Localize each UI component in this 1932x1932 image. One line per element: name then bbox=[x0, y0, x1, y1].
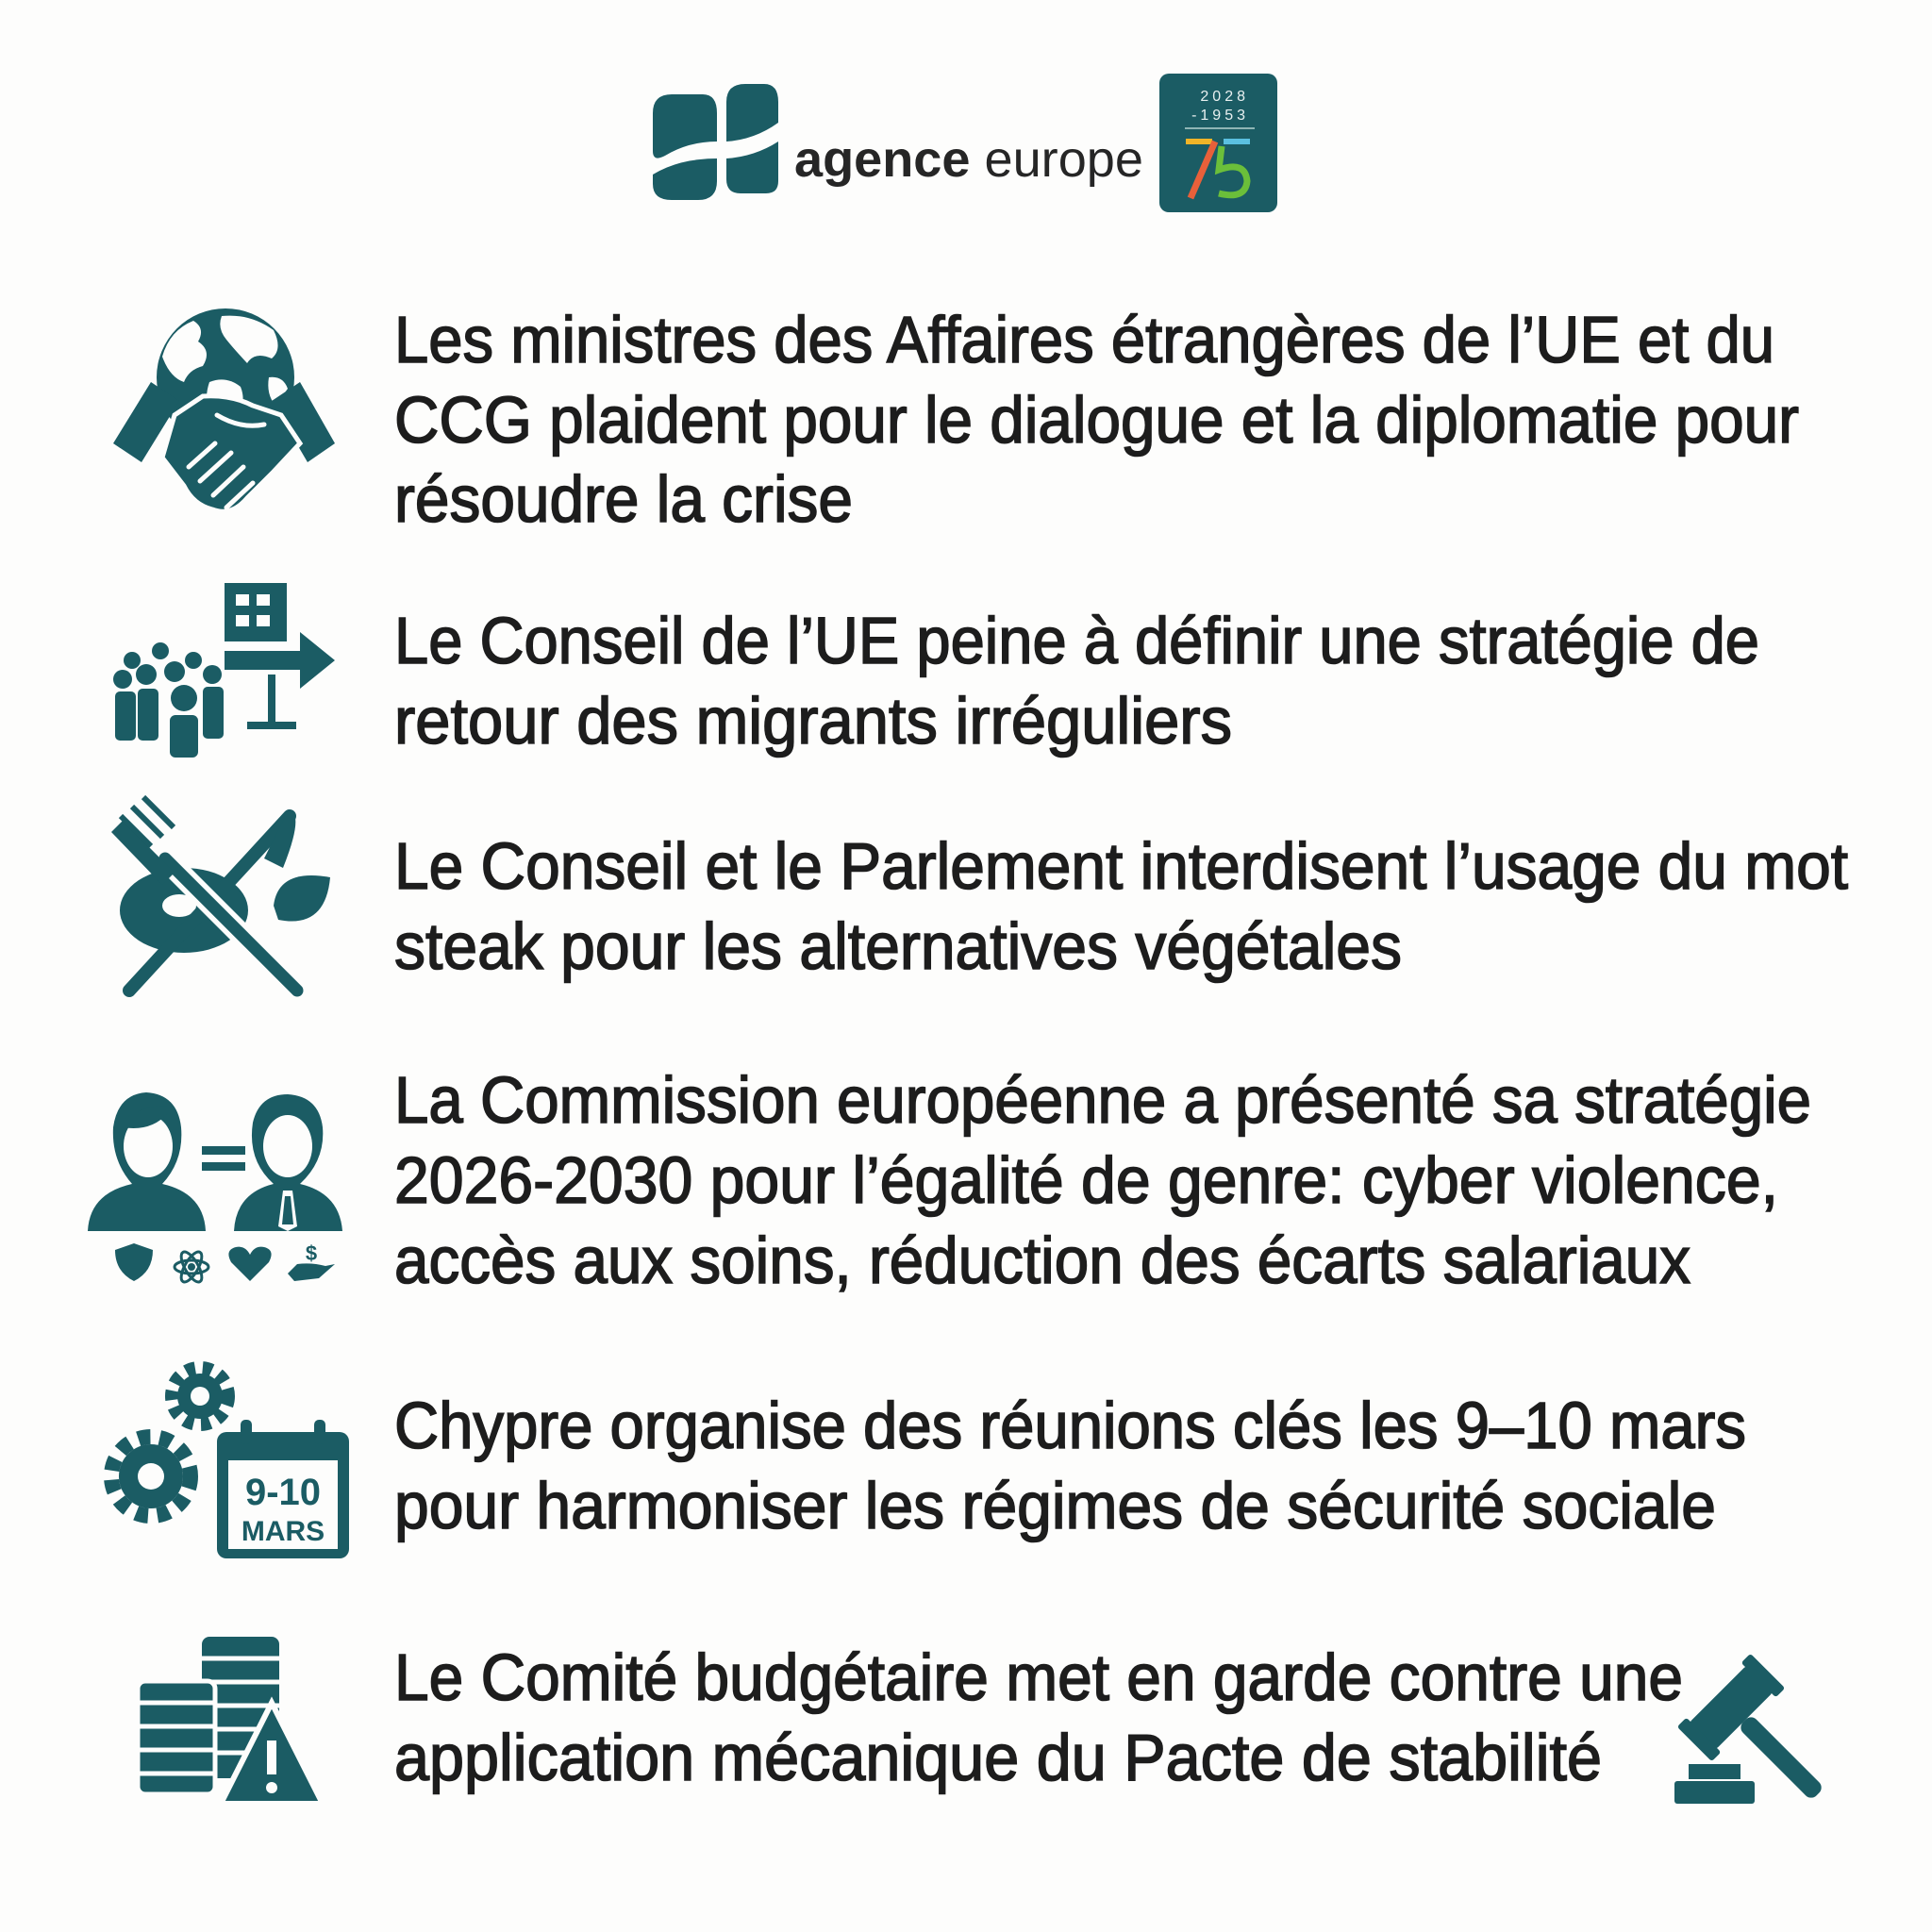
text: retour des migrants irréguliers bbox=[394, 684, 1232, 758]
text: La Commission européenne a présenté sa stratégie bbox=[394, 1063, 1811, 1137]
text: CCG plaident pour le dialogue et la diplomatie pour bbox=[394, 383, 1799, 457]
icon: crossed fork and knife with steak and leaf bbox=[111, 797, 330, 991]
text: pour harmoniser les régimes de sécurité sociale bbox=[394, 1469, 1716, 1542]
item 5 bbox=[111, 1368, 1746, 1558]
text: steak pour les alternatives végétales bbox=[394, 909, 1402, 983]
item 1 bbox=[113, 303, 1799, 536]
text: accès aux soins, réduction des écarts salariaux bbox=[394, 1224, 1690, 1297]
text: 2026-2030 pour l’égalité de genre: cyber violence, bbox=[394, 1143, 1778, 1217]
text: Les ministres des Affaires étrangères de l’UE et du bbox=[394, 303, 1774, 376]
item 3 bbox=[111, 797, 1848, 991]
item 4 bbox=[88, 1063, 1811, 1297]
75th anniversary badge: 2028 bbox=[1200, 89, 1249, 105]
text: Le Comité budgétaire met en garde contre une bbox=[394, 1641, 1683, 1714]
logo text: agence europe bbox=[794, 131, 1143, 188]
icon: globe and handshake bbox=[113, 308, 335, 511]
icon: gears and calendar 9-10 mars: MARS bbox=[242, 1516, 325, 1547]
icon: migrants and building with arrow bbox=[113, 583, 335, 758]
text: application mécanique du Pacte de stabilité bbox=[394, 1721, 1602, 1794]
item 6 bbox=[138, 1637, 1855, 1831]
logo symbol bbox=[653, 84, 778, 200]
text: Le Conseil de l’UE peine à définir une stratégie de bbox=[394, 604, 1759, 677]
icon: gears and calendar 9-10 mars: 9-10 bbox=[245, 1472, 321, 1513]
handshake bbox=[113, 382, 179, 462]
icon: gender equality: $ bbox=[306, 1241, 317, 1265]
icon: gender equality bbox=[88, 1092, 342, 1285]
logo: agence europe bbox=[653, 74, 1277, 212]
item 2 bbox=[113, 583, 1759, 758]
icon: coin stacks with warning bbox=[138, 1637, 323, 1804]
text: Chypre organise des réunions clés les 9–10 mars bbox=[394, 1389, 1746, 1462]
icon: gears and calendar 9-10 mars bbox=[111, 1368, 349, 1558]
text: résoudre la crise bbox=[394, 462, 853, 536]
75th anniversary badge: -1953 bbox=[1191, 108, 1249, 124]
text: Le Conseil et le Parlement interdisent l’usage du mot bbox=[394, 829, 1848, 903]
75th anniversary badge bbox=[1159, 74, 1277, 212]
icon: gavel bbox=[1674, 1654, 1855, 1831]
